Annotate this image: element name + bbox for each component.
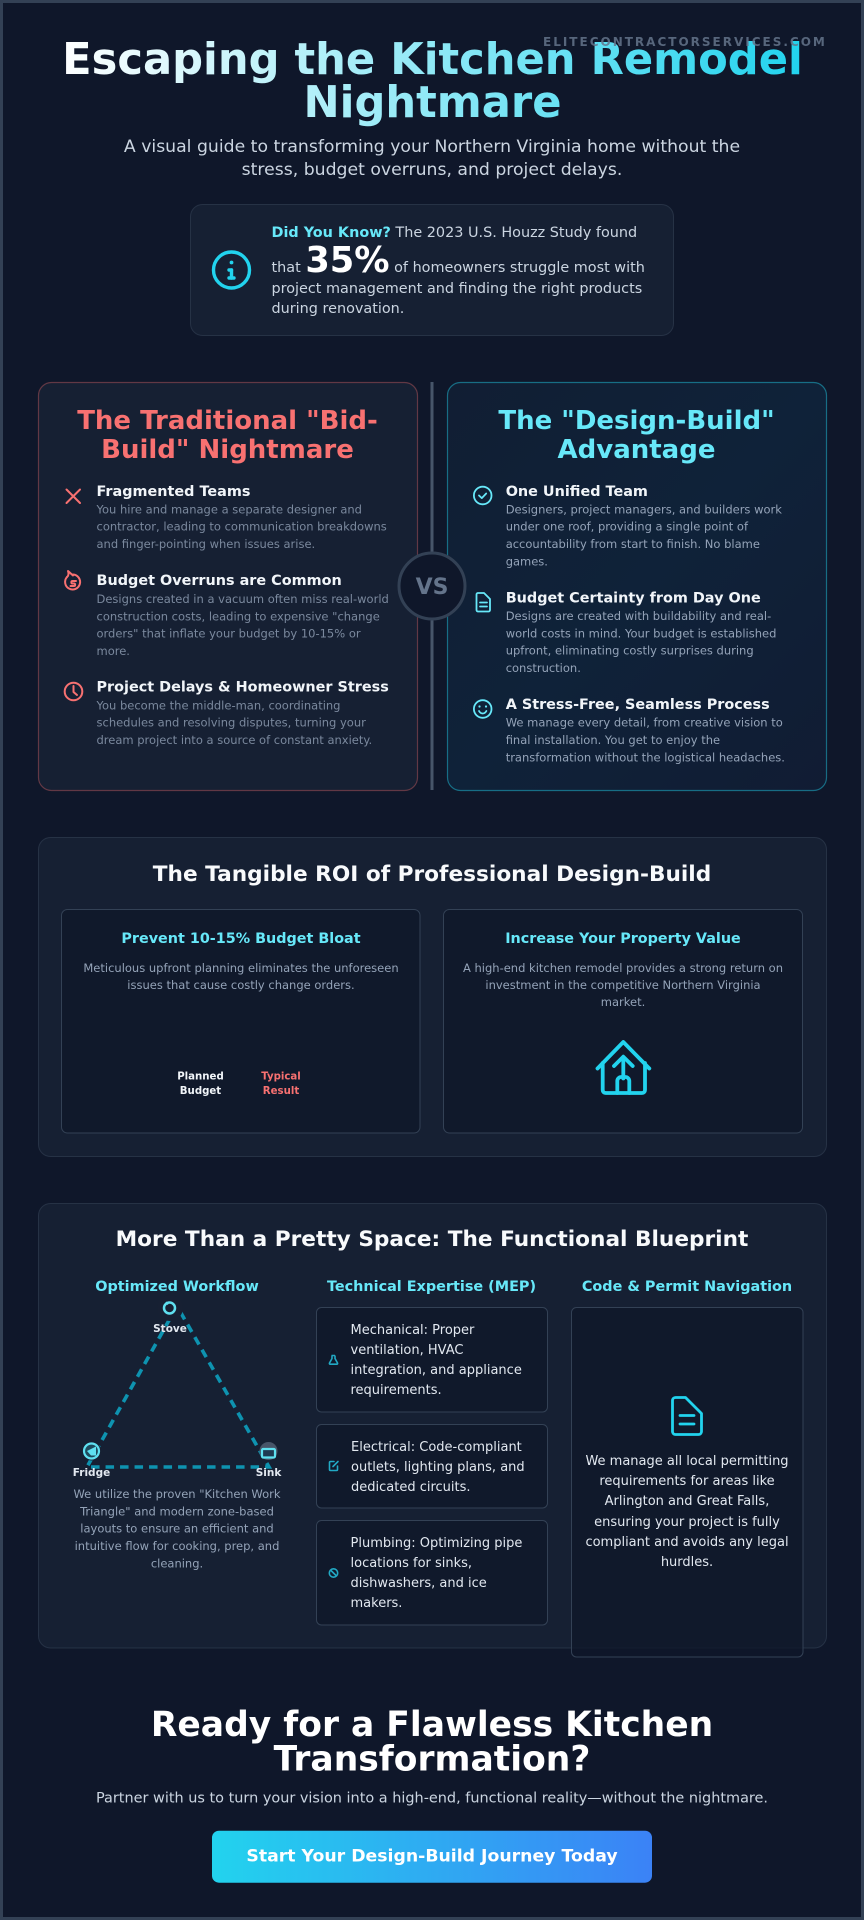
item text: more. <box>96 644 130 658</box>
heading: Advantage <box>558 435 715 465</box>
item text: world costs in mind. Your budget is established <box>506 626 776 640</box>
title <box>62 35 803 128</box>
column: code and permit navigation <box>572 1279 803 1657</box>
panel: functional blueprint <box>38 1204 826 1657</box>
item text: schedules and resolving disputes, turning your <box>96 716 366 730</box>
item text: A Stress-Free, Seamless Process <box>506 697 770 713</box>
item: stress-free <box>474 697 785 764</box>
icon: no symbol <box>329 1569 338 1577</box>
card text: requirements. <box>350 1383 442 1398</box>
item text: construction. <box>506 661 581 675</box>
item text <box>506 484 782 568</box>
item text <box>96 484 387 551</box>
panel: design-build advantage <box>448 382 826 790</box>
icon: clock <box>65 683 82 700</box>
column: code and permit navigation: Code & Permit Navigation <box>582 1279 792 1295</box>
item text: Fragmented Teams <box>96 484 250 500</box>
callout: did you know <box>190 204 674 336</box>
card text: market. <box>601 995 645 1009</box>
item text: construction costs, leading to expensive "change <box>96 609 380 623</box>
footer subtext: Partner with us to turn your vision into a high-end, functional reality—without the nightmare. <box>96 1791 768 1807</box>
subtitle: A visual guide to transforming your Northern Virginia home without the <box>124 137 740 157</box>
heading <box>498 406 775 465</box>
node: fridge <box>73 1442 110 1479</box>
node: stove <box>153 1295 187 1335</box>
heading: The Traditional "Bid- <box>77 406 378 436</box>
workflow text: intuitive flow for cooking, prep, and <box>75 1539 279 1553</box>
item text: Project Delays & Homeowner Stress <box>96 680 389 696</box>
divider line <box>430 382 434 790</box>
card text: integration, and appliance <box>350 1363 522 1378</box>
card text: We manage all local permitting <box>585 1454 789 1469</box>
column: optimized workflow <box>73 1279 282 1570</box>
vs badge: VS <box>416 575 448 600</box>
heading <box>77 406 378 465</box>
vs badge <box>399 553 465 619</box>
card: budget bloat <box>62 910 420 1133</box>
card text <box>83 961 399 992</box>
footer heading: Transformation? <box>274 1740 590 1780</box>
card text: makers. <box>350 1596 402 1611</box>
chart labels: planned budget: Budget <box>180 1086 221 1097</box>
icon: flask <box>329 1356 338 1364</box>
card text: requirements for areas like <box>599 1474 775 1489</box>
card: electrical <box>316 1424 548 1508</box>
card: permits <box>572 1308 803 1657</box>
node: fridge: Fridge <box>73 1467 110 1479</box>
item text: Designs created in a vacuum often miss real-world <box>96 592 389 606</box>
item text: accountability from start to finish. No blame <box>506 537 760 551</box>
workflow text: Triangle" and modern zone-based <box>79 1504 274 1518</box>
heading: The "Design-Build" <box>498 406 775 436</box>
item text: upfront, eliminating costly surprises during <box>506 644 754 658</box>
card: property value: Increase Your Property Value <box>505 931 741 947</box>
icon: document <box>476 593 490 612</box>
chart labels: typical result: Result <box>263 1086 299 1097</box>
card text: Plumbing: Optimizing pipe <box>350 1536 522 1551</box>
item: budget certainty <box>476 590 776 675</box>
item: fragmented teams <box>66 484 387 551</box>
item text <box>96 680 389 747</box>
card text: dishwashers, and ice <box>350 1576 487 1591</box>
item text: One Unified Team <box>506 484 648 500</box>
heading: The Tangible ROI of Professional Design-Build <box>153 862 711 887</box>
column: optimized workflow: Optimized Workflow <box>95 1279 259 1295</box>
subtitle <box>124 137 740 180</box>
item text: and finger-pointing when issues arise. <box>96 537 315 551</box>
item: one unified team <box>474 484 782 568</box>
subtitle: stress, budget overruns, and project delays. <box>242 160 622 180</box>
footer heading: Ready for a Flawless Kitchen <box>151 1705 713 1745</box>
card text: compliant and avoids any legal <box>585 1535 789 1550</box>
button: Start Your Design-Build Journey Today <box>246 1847 618 1867</box>
card text: A high-end kitchen remodel provides a strong return on <box>463 961 783 975</box>
callout text: that 35% of homeowners struggle most with <box>272 240 645 281</box>
card text: ensuring your project is fully <box>594 1515 780 1530</box>
card text: locations for sinks, <box>350 1556 472 1571</box>
title: Escaping the Kitchen Remodel <box>62 35 803 85</box>
item: budget overruns <box>65 571 389 658</box>
column: technical expertise <box>316 1279 548 1625</box>
item text: You become the middle-man, coordinating <box>96 698 340 712</box>
card text <box>350 1323 522 1398</box>
icon: smile <box>474 700 492 718</box>
card text: investment in the competitive Northern Virginia <box>485 978 761 992</box>
item text: dream project into a source of constant anxiety. <box>96 733 372 747</box>
card text: issues that cause costly change orders. <box>127 978 355 992</box>
callout text: project management and finding the right products <box>272 281 642 297</box>
chart labels: planned budget <box>177 1072 224 1097</box>
title: Nightmare <box>304 78 562 128</box>
item text: Budget Certainty from Day One <box>506 590 761 606</box>
item text: Designers, project managers, and builders work <box>506 502 782 516</box>
card text: hurdles. <box>661 1555 713 1570</box>
card: property value <box>444 910 802 1133</box>
callout text: during renovation. <box>272 301 404 317</box>
card text: Electrical: Code-compliant <box>351 1440 522 1455</box>
card text: Arlington and Great Falls, <box>605 1494 769 1509</box>
item text: Designs are created with buildability and real- <box>506 609 771 623</box>
item: project delays <box>65 680 389 747</box>
item text: orders" that inflate your budget by 10-15% or <box>96 627 361 641</box>
item text: We manage every detail, from creative vision to <box>506 716 783 730</box>
card text <box>351 1440 525 1495</box>
item text: under one roof, providing a single point of <box>506 520 749 534</box>
work triangle diagram <box>73 1295 282 1479</box>
item text: contractor, leading to communication breakdowns <box>96 520 387 534</box>
item text: Budget Overruns are Common <box>96 573 342 589</box>
icon: x <box>66 490 80 503</box>
chart labels: planned budget: Planned <box>177 1072 224 1082</box>
node: stove: Stove <box>153 1323 187 1335</box>
node: sink: Sink <box>256 1467 282 1479</box>
icon: document <box>672 1398 702 1434</box>
panel: tangible roi <box>38 838 826 1156</box>
footer heading <box>151 1705 713 1780</box>
card text: ventilation, HVAC <box>350 1343 463 1358</box>
chart labels: typical result: Typical <box>261 1072 301 1082</box>
icon: check circle <box>474 487 492 504</box>
card: mechanical <box>316 1308 548 1412</box>
icon: info <box>214 252 250 288</box>
item text <box>506 697 785 764</box>
callout text: Did You Know? The 2023 U.S. Houzz Study found <box>272 225 637 241</box>
button <box>212 1831 652 1883</box>
column: technical expertise: Technical Expertise (MEP) <box>327 1279 536 1295</box>
item text: transformation without the logistical headaches. <box>506 750 785 764</box>
workflow text: layouts to ensure an efficient and <box>80 1522 274 1536</box>
node: sink <box>256 1442 282 1479</box>
item text: games. <box>506 554 548 568</box>
workflow text: cleaning. <box>151 1556 203 1570</box>
chart labels: typical result <box>261 1072 301 1097</box>
card text: outlets, lighting plans, and <box>351 1460 525 1475</box>
card: budget bloat: Prevent 10-15% Budget Bloat <box>121 931 361 947</box>
workflow text <box>73 1487 281 1570</box>
item text: You hire and manage a separate designer and <box>96 502 362 516</box>
card text <box>350 1536 522 1611</box>
heading: More Than a Pretty Space: The Functional Blueprint <box>116 1227 748 1252</box>
card text: Mechanical: Proper <box>350 1323 475 1338</box>
heading: Build" Nightmare <box>101 435 354 465</box>
card text: dedicated circuits. <box>351 1480 471 1495</box>
callout text <box>272 225 645 317</box>
item text <box>96 573 389 658</box>
item text: final installation. You get to enjoy the <box>506 733 720 747</box>
panel: traditional bid-build <box>38 382 418 790</box>
card: plumbing <box>316 1520 548 1625</box>
card text <box>463 961 783 1009</box>
workflow text: We utilize the proven "Kitchen Work <box>73 1487 281 1501</box>
icon: house with arrow <box>598 1042 649 1093</box>
card text <box>585 1454 789 1570</box>
website watermark: ELITECONTRACTORSERVICES.COM <box>543 35 827 49</box>
icon: flame dollar <box>65 571 80 589</box>
icon: edit <box>330 1462 338 1470</box>
item text <box>506 590 776 675</box>
card text: Meticulous upfront planning eliminates the unforeseen <box>83 961 399 975</box>
